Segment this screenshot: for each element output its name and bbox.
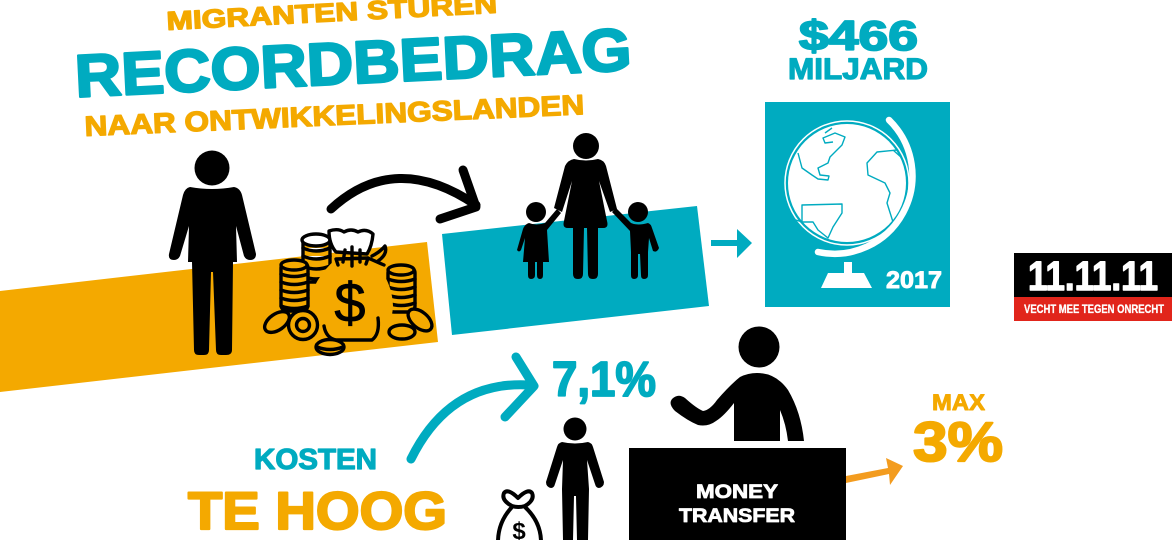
max 3% label: MAX bbox=[932, 390, 985, 415]
kosten te hoog label bbox=[188, 444, 447, 540]
amount heading: MILJARD bbox=[788, 53, 928, 86]
amount heading bbox=[788, 12, 928, 86]
globe arm bbox=[818, 120, 912, 254]
icon: money bag with coins bbox=[261, 230, 436, 354]
kosten te hoog label: KOSTEN bbox=[254, 444, 377, 476]
icon: mother and children bbox=[517, 133, 659, 279]
icon: customer man bbox=[546, 418, 604, 540]
title bbox=[73, 0, 633, 142]
money transfer desk bbox=[629, 448, 846, 540]
right coin stack bbox=[388, 265, 415, 312]
back coin stack bbox=[302, 234, 330, 282]
bag crease bbox=[324, 318, 378, 340]
max 3% label bbox=[913, 390, 1003, 473]
percentage 7,1%: 7,1% bbox=[552, 353, 656, 407]
ring coin bbox=[288, 310, 318, 340]
bag knot bbox=[329, 230, 373, 254]
amount heading: $466 bbox=[799, 12, 918, 59]
globe stand bbox=[821, 262, 872, 288]
bottom coin bbox=[316, 340, 344, 354]
fallen coins bbox=[261, 305, 436, 339]
left child bbox=[517, 202, 561, 279]
title: RECORDBEDRAG bbox=[73, 16, 633, 110]
mother bbox=[554, 133, 617, 279]
teal band bbox=[442, 206, 709, 335]
money transfer desk: TRANSFER bbox=[679, 506, 795, 527]
left coin stack bbox=[281, 260, 308, 311]
orange arrow bbox=[846, 458, 903, 485]
globe bbox=[785, 121, 909, 245]
icon: small money bag bbox=[498, 491, 541, 540]
bag body bbox=[310, 256, 393, 340]
kosten te hoog label: TE HOOG bbox=[188, 482, 447, 540]
logo 11.11.11 bbox=[1014, 253, 1172, 321]
panel: globe 2017 bbox=[765, 102, 950, 307]
dollar sign on bag: $ bbox=[334, 271, 366, 334]
curved teal arrow bbox=[411, 357, 534, 459]
right child bbox=[612, 202, 659, 279]
orange band bbox=[0, 242, 438, 392]
max 3% label: 3% bbox=[913, 410, 1003, 473]
curved black arrow bbox=[331, 170, 476, 219]
money transfer desk: MONEY bbox=[696, 482, 778, 503]
year label: 2017 bbox=[886, 267, 942, 294]
small teal arrow bbox=[711, 229, 752, 258]
icon: migrant man bbox=[169, 150, 256, 355]
icon: teller bbox=[671, 326, 804, 441]
title: NAAR ONTWIKKELINGSLANDEN bbox=[84, 89, 585, 142]
